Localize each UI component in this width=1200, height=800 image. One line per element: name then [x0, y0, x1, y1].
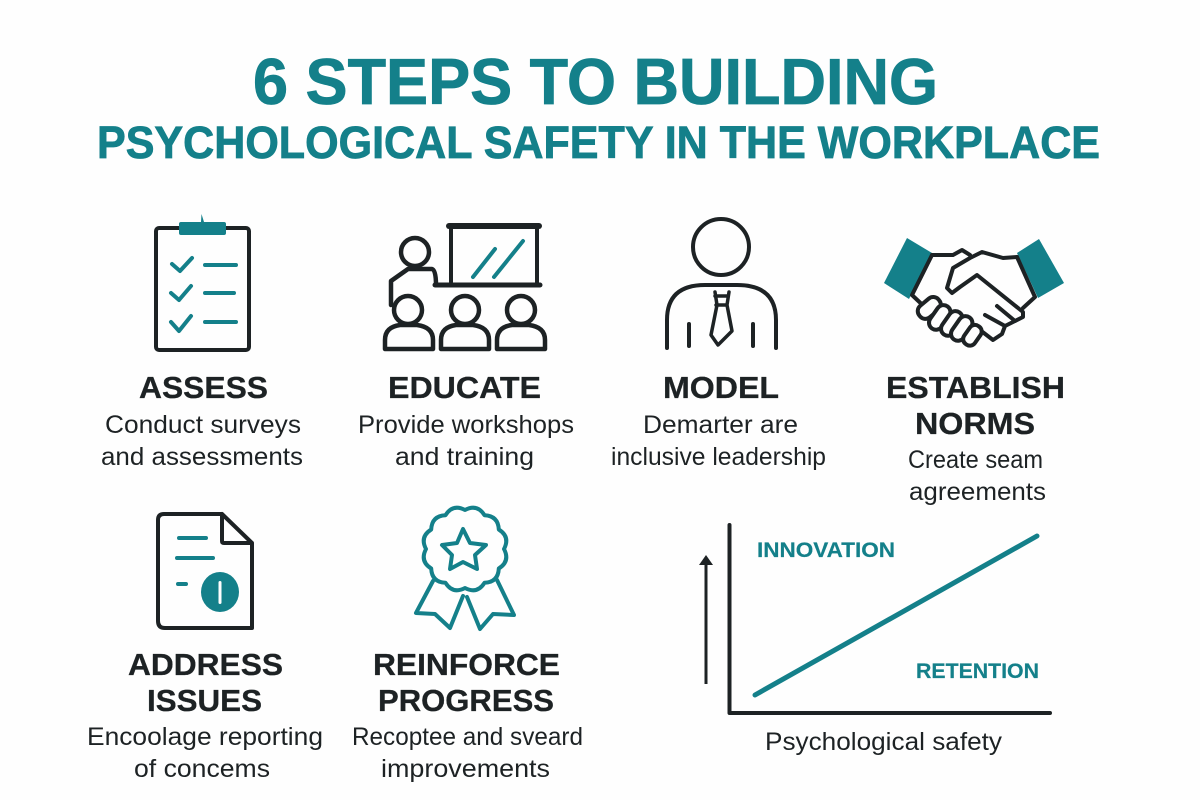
description: model	[611, 411, 826, 471]
heading: establish norms	[886, 370, 1065, 441]
description: reinforce progress	[352, 723, 583, 783]
axis label: Psychological safety	[765, 728, 1003, 756]
heading: establish norms: ESTABLISH	[886, 370, 1065, 405]
heading: address issues: ISSUES	[147, 683, 262, 718]
description: address issues	[87, 723, 323, 783]
heading: educate: EDUCATE	[388, 370, 541, 405]
heading: model: MODEL	[663, 370, 779, 405]
description: establish norms: Create seam	[908, 446, 1043, 474]
description: reinforce progress: improvements	[381, 755, 550, 783]
chart axes	[730, 525, 1050, 713]
description: establish norms: agreements	[909, 478, 1046, 506]
description: model: inclusive leadership	[611, 443, 826, 471]
description: model: Demarter are	[643, 411, 798, 439]
label: innovation: INNOVATION	[757, 539, 895, 562]
step: model	[611, 219, 826, 471]
step: address issues	[87, 514, 323, 783]
step: educate	[358, 226, 574, 471]
description: reinforce progress: Recoptee and sveard	[352, 723, 583, 751]
heading: address issues	[128, 647, 283, 718]
heading: reinforce progress	[373, 647, 560, 718]
icon: handshake	[884, 238, 1064, 348]
label: retention: RETENTION	[916, 660, 1039, 683]
heading: establish norms: NORMS	[915, 406, 1035, 441]
step: assess	[101, 214, 303, 471]
chart: innovation and retention vs psychological safety	[699, 525, 1050, 756]
description: educate: and training	[395, 443, 534, 471]
description: assess: and assessments	[101, 443, 303, 471]
icon: document with alert	[158, 514, 252, 628]
step: establish norms	[884, 238, 1065, 506]
step: reinforce progress	[352, 508, 583, 783]
heading: reinforce progress: REINFORCE	[373, 647, 560, 682]
arrow: upward trend	[699, 555, 713, 684]
heading: reinforce progress: PROGRESS	[378, 683, 554, 718]
icon: presenter with audience	[385, 226, 545, 349]
heading: address issues: ADDRESS	[128, 647, 283, 682]
title: PSYCHOLOGICAL SAFETY IN THE WORKPLACE	[97, 117, 1100, 168]
title: 6 STEPS TO BUILDING	[253, 45, 938, 118]
icon: clipboard checklist	[156, 214, 249, 350]
description: address issues: Encoolage reporting	[87, 723, 323, 751]
description: establish norms	[908, 446, 1046, 506]
description: assess: Conduct surveys	[105, 411, 301, 439]
heading: assess: ASSESS	[139, 370, 268, 405]
description: educate: Provide workshops	[358, 411, 574, 439]
description: address issues: of concems	[134, 755, 270, 783]
title	[97, 45, 1100, 168]
description: assess	[101, 411, 303, 471]
icon: award ribbon	[416, 508, 514, 629]
icon: leader with tie	[667, 219, 776, 348]
trend line	[755, 536, 1037, 695]
description: educate	[358, 411, 574, 471]
